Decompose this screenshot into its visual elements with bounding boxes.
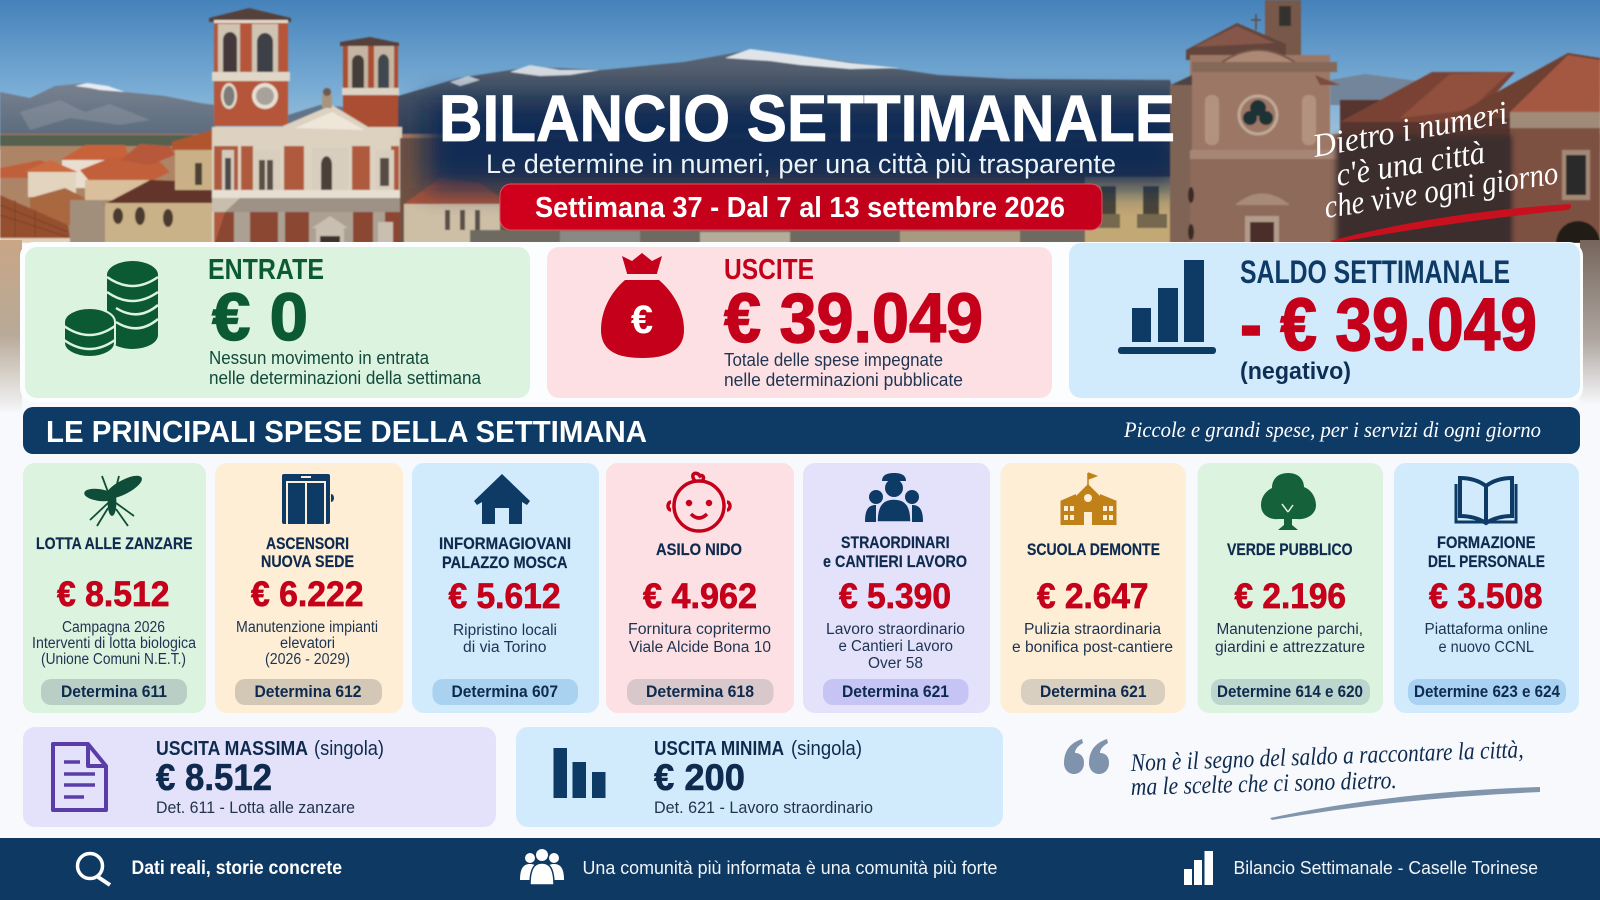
title: e CANTIERI LAVORO [823, 553, 967, 571]
panel: uscite [547, 247, 1052, 398]
title [261, 535, 354, 571]
week pill [500, 184, 1102, 230]
title: VERDE PUBBLICO [1227, 541, 1353, 559]
footer text 1: Dati reali, storie concrete [132, 858, 342, 879]
description [628, 621, 771, 656]
description [236, 619, 378, 668]
title: SCUOLA DEMONTE [1027, 541, 1160, 559]
title backdrop shade [425, 100, 1185, 188]
facade [212, 127, 402, 243]
reference pill [1021, 679, 1165, 705]
reference pill: Determina 621 [1040, 683, 1146, 701]
card: asilo nido [606, 463, 794, 713]
right tower [343, 42, 398, 134]
right brick buildings [1339, 99, 1511, 242]
description [453, 622, 557, 656]
reference pill: Determina 607 [452, 683, 558, 701]
subtitle: Le determine in numeri, per una città più trasparente [486, 149, 1116, 179]
description: Viale Alcide Bona 10 [629, 639, 771, 656]
icon: elevator [282, 474, 334, 524]
panel: saldo [1069, 243, 1580, 398]
handwritten note: Dietro i numeri [1309, 95, 1510, 165]
hero edge fade: right [1580, 240, 1600, 405]
description: Over 58 [868, 655, 923, 672]
description: Manutenzione parchi, [1216, 621, 1363, 638]
note: Totale delle spese impegnate [724, 350, 943, 370]
reference pill [235, 679, 382, 705]
left tower [214, 18, 288, 126]
right church [1265, 0, 1301, 60]
title [823, 534, 967, 571]
handwritten note: che vive ogni giorno [1322, 155, 1561, 226]
icon: workers [865, 473, 923, 522]
title: LOTTA ALLE ZANZARE [36, 535, 192, 553]
description: (Unione Comuni N.E.T.) [41, 651, 186, 668]
description [1012, 621, 1173, 656]
value: € 8.512 [156, 757, 272, 798]
qualifier: (singola) [314, 738, 384, 760]
reference pill [1211, 679, 1370, 705]
note: nelle determinazioni della settimana [209, 368, 482, 388]
reference pill: Determine 614 e 620 [1217, 683, 1363, 701]
icon: mosquito [84, 473, 144, 526]
amount: € 3.508 [1429, 577, 1542, 616]
card: informagiovani [412, 463, 599, 713]
title: PALAZZO MOSCA [442, 554, 568, 572]
description: Fornitura copritermo [628, 621, 771, 638]
footer [0, 838, 1600, 900]
left annex [103, 180, 212, 205]
amount: € 2.647 [1037, 577, 1148, 616]
reference pill: Determina 618 [646, 683, 754, 701]
description: Lavoro straordinario [826, 621, 965, 638]
icon: bars [554, 748, 606, 798]
title [439, 535, 571, 572]
icon: magnifier [78, 854, 110, 885]
reference pill: Determina 612 [254, 683, 362, 701]
card: scuola demonte [1000, 463, 1186, 713]
description: e nuovo CCNL [1438, 639, 1534, 656]
icon: school [1060, 473, 1117, 525]
handwritten note: c'è una città [1334, 135, 1487, 194]
icon: document [53, 744, 106, 810]
note [724, 350, 963, 390]
card: straordinari [803, 463, 990, 713]
amount: € 5.390 [839, 577, 951, 616]
reference pill: Determina 611 [61, 683, 167, 701]
description: Manutenzione impianti [236, 619, 378, 636]
week pill: Settimana 37 - Dal 7 al 13 settembre 2026 [535, 192, 1065, 224]
icon: house [474, 474, 530, 524]
hero photo: town, churches and mountains [0, 0, 1600, 247]
description [826, 621, 965, 672]
section heading: LE PRINCIPALI SPESE DELLA SETTIMANA [46, 414, 647, 449]
title: NUOVA SEDE [261, 553, 354, 571]
amount: € 4.962 [643, 577, 757, 616]
handwritten note [1309, 95, 1561, 226]
description: Piattaforma online [1424, 621, 1548, 638]
title: DEL PERSONALE [1428, 553, 1545, 571]
description: Interventi di lotta biologica [32, 635, 196, 652]
description: di via Torino [463, 639, 546, 656]
note: Nessun movimento in entrata [209, 348, 430, 368]
description: (2026 - 2029) [265, 651, 350, 668]
icon: money bag [601, 253, 684, 358]
quote text: ma le scelte che ci sono dietro. [1130, 767, 1397, 801]
icon: open book [1456, 478, 1516, 523]
icon: bar chart [1118, 260, 1216, 354]
section tagline: Piccole e grandi spese, per i servizi di ogni giorno [1123, 417, 1541, 442]
quote text [1129, 736, 1524, 801]
icon: quote mark [1064, 739, 1109, 774]
label: USCITE [724, 254, 814, 286]
value: - € 39.049 [1240, 283, 1537, 366]
summary frame [20, 242, 1583, 402]
description [32, 619, 196, 668]
label: SALDO SETTIMANALE [1240, 254, 1510, 290]
panel: entrate [25, 247, 530, 398]
value: € 39.049 [724, 279, 983, 357]
note [209, 348, 482, 388]
note: Det. 611 - Lotta alle zanzare [156, 799, 355, 817]
title: INFORMAGIOVANI [439, 535, 571, 553]
description: giardini e attrezzature [1215, 639, 1365, 656]
title: BILANCIO SETTIMANALE [439, 81, 1175, 155]
description: e Cantieri Lavoro [838, 638, 953, 655]
description: Ripristino locali [453, 622, 557, 639]
title: FORMAZIONE [1437, 534, 1536, 552]
reference pill [41, 679, 187, 705]
card: lotta alle zanzare [23, 463, 206, 713]
amount: € 8.512 [57, 575, 170, 614]
panel: uscita massima [23, 727, 496, 827]
label: USCITA MINIMA [654, 738, 784, 760]
value: € 200 [654, 757, 745, 798]
quote underline stroke [1270, 787, 1540, 820]
red brush stroke [1330, 204, 1571, 243]
reference pill [823, 679, 968, 705]
description: elevatori [280, 635, 335, 652]
label: ENTRATE [208, 254, 324, 286]
title: STRAORDINARI [841, 534, 950, 552]
icon: baby face [668, 473, 730, 531]
amount: € 2.196 [1234, 577, 1346, 616]
reference pill [1408, 679, 1566, 705]
reference pill: Determina 621 [842, 683, 949, 701]
reference pill [432, 679, 578, 705]
note: Det. 621 - Lavoro straordinario [654, 799, 873, 817]
left town roofs [0, 135, 215, 147]
description [1424, 621, 1548, 656]
card: formazione [1394, 463, 1579, 713]
amount: € 6.222 [251, 575, 364, 614]
card: verde pubblico [1198, 463, 1383, 713]
value: € 0 [212, 280, 308, 355]
description: e bonifica post-cantiere [1012, 639, 1173, 656]
icon: money bag: € [631, 298, 653, 342]
footer text 2: Una comunità più informata è una comunità più forte [582, 857, 998, 878]
title: ASILO NIDO [656, 541, 742, 559]
note: nelle determinazioni pubblicate [724, 370, 963, 390]
section band [23, 407, 1580, 454]
reference pill [627, 679, 774, 705]
footer text 3: Bilancio Settimanale - Caselle Torinese [1234, 857, 1538, 878]
qualifier: (singola) [791, 738, 862, 760]
icon: community [520, 849, 564, 885]
amount: € 5.612 [448, 577, 560, 616]
centre buildings below title [399, 137, 1085, 242]
icon: coins [64, 261, 158, 357]
description [1215, 621, 1365, 656]
icon: footer bars [1184, 851, 1213, 885]
icon: tree [1261, 473, 1316, 530]
card: ascensori [215, 463, 403, 713]
title [1428, 534, 1545, 571]
panel: uscita minima [516, 727, 1003, 827]
quote text: Non è il segno del saldo a raccontare la città, [1129, 736, 1524, 777]
note: (negativo) [1240, 358, 1351, 385]
reference pill: Determine 623 e 624 [1414, 683, 1561, 701]
title: ASCENSORI [266, 535, 349, 553]
description: Campagna 2026 [62, 619, 165, 636]
description: Pulizia straordinaria [1024, 621, 1161, 638]
hero edge fade: left [0, 240, 22, 412]
label: USCITA MASSIMA [156, 738, 308, 760]
